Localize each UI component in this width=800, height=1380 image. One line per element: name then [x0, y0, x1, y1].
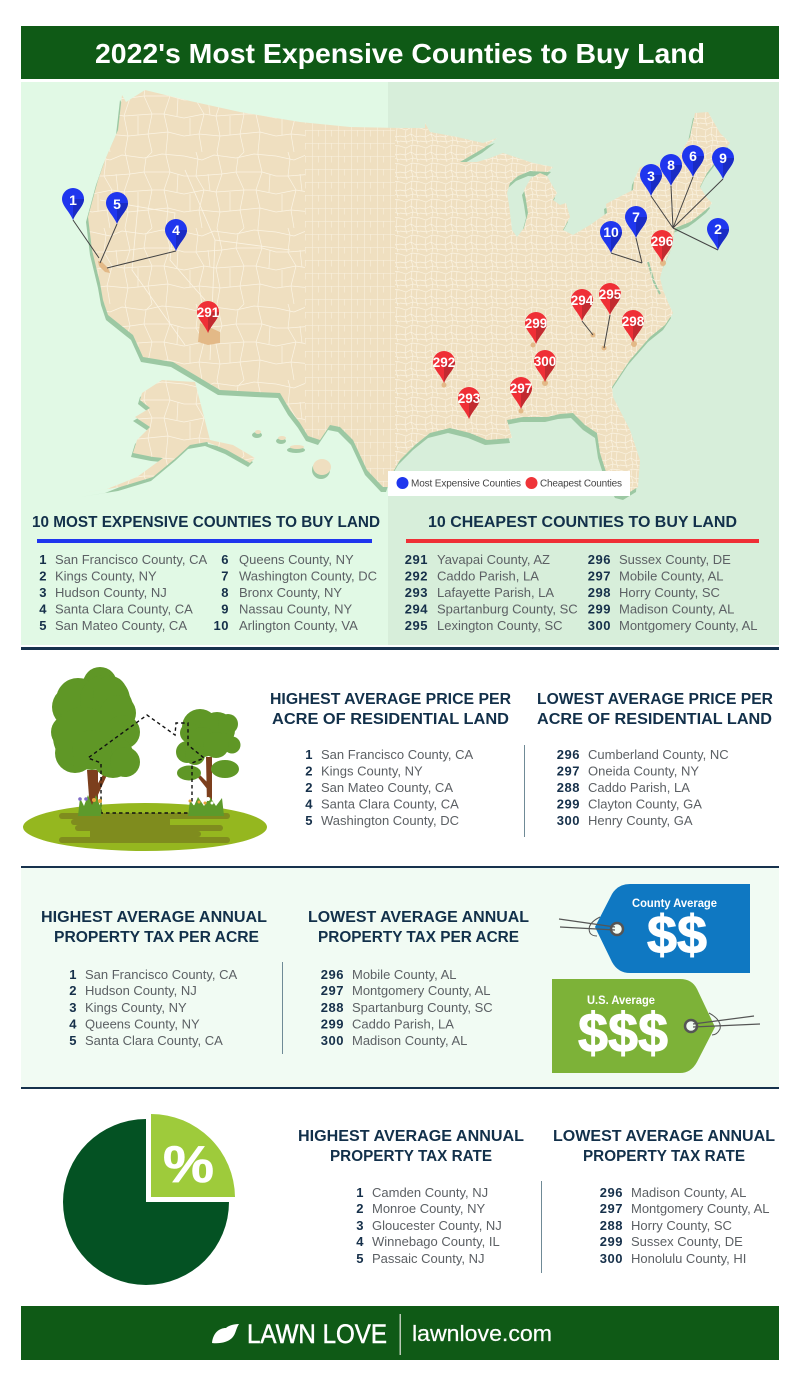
list: lowest annual tax per acre: 296 — [321, 967, 344, 982]
list: cheapest counties: Spartanburg County, SC — [437, 602, 578, 616]
list: lowest price per acre — [557, 747, 729, 828]
illustration: trees and dashed house on lawn — [23, 667, 267, 851]
icon: U.S. average price tag: U.S. Average — [587, 993, 655, 1007]
list: highest annual tax per acre: Santa Clara County, CA — [85, 1033, 223, 1048]
list: highest annual tax rate: 3 — [356, 1218, 364, 1233]
pin 10 — [600, 221, 622, 253]
list: most expensive counties: Arlington County, VA — [239, 618, 358, 633]
list: highest annual tax rate: 2 — [356, 1201, 364, 1216]
pin 297: 297 — [510, 381, 532, 396]
pin 5: 5 — [113, 196, 121, 212]
heading: 10 cheapest: 10 CHEAPEST COUNTIES TO BUY LAND — [428, 514, 737, 531]
list: highest annual tax per acre: Queens County, NY — [85, 1016, 200, 1032]
pin 298: 298 — [622, 314, 645, 329]
divider rule — [21, 866, 779, 868]
list: cheapest counties: Lexington County, SC — [437, 618, 562, 633]
list: cheapest counties: 296 — [588, 552, 611, 567]
list: lowest annual tax rate: 299 — [600, 1234, 623, 1249]
heading: lowest annual tax rate — [553, 1128, 775, 1165]
pin 296: 296 — [651, 234, 674, 249]
icon: U.S. average price tag — [552, 979, 760, 1073]
list: lowest annual tax per acre: 297 — [321, 983, 344, 998]
heading: highest price per acre: ACRE OF RESIDENTIAL LAND — [272, 711, 509, 728]
list: lowest annual tax rate: Sussex County, DE — [631, 1234, 743, 1249]
list: highest annual tax rate: Passaic County, NJ — [372, 1251, 484, 1266]
list: most expensive counties: Bronx County, NY — [239, 585, 342, 600]
list: highest annual tax per acre: Hudson County, NJ — [85, 983, 197, 998]
list: lowest annual tax rate: 296 — [600, 1185, 623, 1200]
list: highest price per acre: 5 — [305, 813, 313, 828]
map legend: Most Expensive Counties — [411, 478, 521, 490]
title banner — [21, 26, 779, 79]
list: lowest annual tax per acre: Spartanburg County, SC — [352, 1000, 493, 1015]
list: highest annual tax rate — [356, 1185, 502, 1266]
panel: property tax background — [21, 868, 779, 1087]
list: most expensive counties: 3 — [39, 585, 47, 600]
pin 2: 2 — [714, 221, 722, 237]
list: cheapest counties — [405, 552, 758, 633]
pin 7 — [625, 206, 647, 238]
pin 293: 293 — [458, 391, 481, 406]
list: highest price per acre: San Mateo County, CA — [321, 780, 453, 795]
list: most expensive counties: 4 — [39, 602, 47, 616]
list: highest price per acre: Santa Clara County, CA — [321, 796, 459, 812]
list: lowest annual tax per acre: Mobile County, AL — [352, 967, 457, 982]
list: cheapest counties: 291 — [405, 552, 428, 567]
map of US counties — [80, 85, 735, 500]
map: Hawaii land — [255, 430, 331, 475]
list: most expensive counties: Hudson County, NJ — [55, 585, 167, 600]
list: cheapest counties: Lafayette Parish, LA — [437, 585, 554, 600]
pin 292: 292 — [433, 355, 455, 370]
list: most expensive counties: 2 — [39, 568, 47, 584]
list: lowest annual tax per acre: Montgomery County, AL — [352, 983, 490, 998]
list: most expensive counties: 9 — [221, 602, 229, 616]
heading: highest annual tax rate — [298, 1128, 524, 1165]
heading: highest annual tax per acre — [41, 909, 267, 946]
list: cheapest counties: 299 — [588, 602, 611, 616]
heading: highest price per acre: HIGHEST AVERAGE PRICE PER — [270, 691, 511, 708]
pin 299 — [525, 312, 547, 344]
list: most expensive counties — [39, 552, 377, 633]
pin 2 — [707, 218, 729, 250]
bar: blue underline — [37, 539, 372, 543]
list: lowest annual tax rate: Honolulu County, HI — [631, 1251, 746, 1266]
list: lowest price per acre: 300 — [557, 813, 580, 828]
list: most expensive counties: 1 — [39, 552, 47, 567]
list: most expensive counties: 6 — [221, 552, 229, 567]
title banner: 2022's Most Expensive Counties to Buy Land — [95, 38, 705, 69]
pin 8 — [660, 154, 682, 186]
pin 295: 295 — [599, 287, 622, 302]
pin 10: 10 — [603, 224, 619, 240]
list: lowest price per acre: Clayton County, GA — [588, 796, 702, 812]
list: highest annual tax per acre: Kings County, NY — [85, 1000, 187, 1015]
pin 9: 9 — [719, 150, 727, 166]
list: highest annual tax rate: 5 — [356, 1251, 364, 1266]
heading: highest annual tax rate: PROPERTY TAX RATE — [330, 1148, 492, 1165]
divider rule — [21, 1087, 779, 1089]
list: cheapest counties: 292 — [405, 568, 428, 584]
list: most expensive counties: Washington County, DC — [239, 568, 377, 584]
list: lowest price per acre: Cumberland County, NC — [588, 747, 729, 762]
heading: lowest price per acre: ACRE OF RESIDENTIAL LAND — [537, 711, 772, 728]
list: lowest annual tax rate: 288 — [600, 1218, 623, 1233]
list: lowest price per acre: Henry County, GA — [588, 813, 693, 828]
list: most expensive counties: San Francisco County, CA — [55, 552, 208, 567]
vertical divider — [524, 745, 525, 837]
heading: highest annual tax per acre: PROPERTY TAX PER ACRE — [54, 929, 259, 946]
list: highest annual tax per acre: 5 — [69, 1033, 77, 1048]
list: highest annual tax rate: Monroe County, NY — [372, 1201, 486, 1216]
highlighted counties — [98, 260, 666, 414]
list: cheapest counties: 300 — [588, 618, 611, 633]
list: highest price per acre: 1 — [305, 747, 313, 762]
pin 6 — [682, 145, 704, 177]
list: cheapest counties: Montgomery County, AL — [619, 618, 758, 633]
list: highest annual tax per acre: San Francisco County, CA — [85, 967, 238, 982]
heading: 10 most expensive: 10 MOST EXPENSIVE COUNTIES TO BUY LAND — [32, 514, 380, 531]
bar: red underline — [406, 539, 759, 543]
list: lowest annual tax rate — [600, 1185, 770, 1266]
heading: highest annual tax per acre: HIGHEST AVERAGE ANNUAL — [41, 909, 267, 926]
icon: county average price tag: $$ — [647, 905, 707, 965]
list: most expensive counties: San Mateo County, CA — [55, 618, 187, 633]
list: lowest annual tax rate: Montgomery County, AL — [631, 1201, 770, 1216]
icon: Lawn Love leaf — [212, 1324, 239, 1343]
pin 291: 291 — [197, 305, 220, 320]
list: lowest annual tax rate: Madison County, AL — [631, 1185, 746, 1200]
list: highest annual tax per acre: 3 — [69, 1000, 77, 1015]
list: lowest annual tax per acre: Caddo Parish, LA — [352, 1016, 454, 1032]
heading: lowest annual tax per acre: PROPERTY TAX PER ACRE — [318, 929, 519, 946]
pin 297 — [510, 377, 532, 409]
list: lowest annual tax per acre: 288 — [321, 1000, 344, 1015]
pin 293 — [458, 387, 481, 419]
list: highest annual tax rate: Winnebago County, IL — [372, 1234, 500, 1249]
list: highest price per acre: 2 — [305, 780, 313, 795]
list: lowest annual tax per acre: 300 — [321, 1033, 344, 1048]
list: lowest price per acre: 288 — [557, 780, 580, 795]
list: lowest price per acre: 297 — [557, 764, 580, 778]
list: cheapest counties: Madison County, AL — [619, 602, 734, 616]
footer banner: LAWN LOVE — [247, 1319, 387, 1349]
pin 7: 7 — [632, 209, 640, 225]
list: lowest price per acre: 299 — [557, 796, 580, 812]
list: highest annual tax rate: Camden County, NJ — [372, 1185, 488, 1200]
list: highest annual tax per acre: 4 — [69, 1016, 77, 1032]
pie chart with percent slice — [63, 1114, 235, 1285]
pin 298 — [622, 310, 645, 342]
heading: lowest annual tax per acre: LOWEST AVERAGE ANNUAL — [308, 909, 529, 926]
pin 299: 299 — [525, 316, 547, 331]
heading: lowest annual tax per acre — [308, 909, 529, 946]
list: highest price per acre: San Francisco County, CA — [321, 747, 474, 762]
pin 3: 3 — [647, 168, 655, 184]
pin 300 — [534, 350, 556, 382]
list: highest annual tax per acre — [69, 967, 238, 1048]
heading: highest price per acre — [270, 691, 511, 728]
list: cheapest counties: 294 — [405, 602, 428, 616]
list: highest price per acre: Washington County, DC — [321, 813, 459, 828]
list: most expensive counties: Santa Clara County, CA — [55, 602, 193, 616]
footer banner — [21, 1306, 779, 1360]
vertical divider — [541, 1181, 542, 1273]
list: lowest annual tax per acre — [321, 967, 493, 1048]
footer banner: lawnlove.com — [412, 1321, 552, 1346]
list: highest annual tax rate: 4 — [356, 1234, 364, 1249]
panel: map and county rankings background — [21, 82, 779, 645]
list: lowest price per acre: Caddo Parish, LA — [588, 780, 690, 795]
map: Hawaii islands — [252, 432, 330, 479]
list: highest price per acre: 2 — [305, 764, 313, 778]
list: lowest annual tax rate: 297 — [600, 1201, 623, 1216]
list: cheapest counties: Mobile County, AL — [619, 568, 724, 584]
heading: lowest annual tax rate: PROPERTY TAX RATE — [583, 1148, 745, 1165]
list: cheapest counties: Sussex County, DE — [619, 552, 731, 567]
list: most expensive counties: 10 — [214, 618, 229, 633]
list: highest price per acre: 4 — [305, 796, 313, 812]
list: highest annual tax rate: Gloucester County, NJ — [372, 1218, 502, 1233]
list: lowest price per acre: Oneida County, NY — [588, 764, 699, 778]
list: highest annual tax per acre: 2 — [69, 983, 77, 998]
list: cheapest counties: Yavapai County, AZ — [437, 552, 550, 567]
list: highest price per acre — [305, 747, 474, 828]
pin 295 — [599, 283, 622, 315]
list: cheapest counties: 298 — [588, 585, 611, 600]
heading: lowest annual tax rate: LOWEST AVERAGE ANNUAL — [553, 1128, 775, 1145]
pie chart with percent slice: % — [163, 1136, 214, 1194]
pin 292 — [433, 351, 455, 383]
icon: U.S. average price tag: $$$ — [578, 1001, 668, 1064]
pin 4 — [165, 219, 187, 251]
heading: lowest price per acre — [537, 691, 773, 728]
pin 300: 300 — [534, 354, 556, 369]
list: lowest annual tax per acre: Madison County, AL — [352, 1033, 467, 1048]
pin 4: 4 — [172, 222, 180, 238]
pin 3 — [640, 164, 662, 196]
list: highest annual tax rate: 1 — [356, 1185, 364, 1200]
pin 296 — [651, 230, 674, 262]
pin 8: 8 — [667, 157, 675, 173]
icon: county average price tag: County Average — [632, 896, 717, 910]
list: lowest annual tax per acre: 299 — [321, 1016, 344, 1032]
list: most expensive counties: Kings County, NY — [55, 568, 157, 584]
pin 294: 294 — [571, 293, 594, 308]
list: lowest price per acre: 296 — [557, 747, 580, 762]
list: most expensive counties: 8 — [221, 585, 229, 600]
list: cheapest counties: 297 — [588, 568, 611, 584]
pin 1 — [62, 188, 84, 220]
list: lowest annual tax rate: Horry County, SC — [631, 1218, 732, 1233]
vertical divider — [282, 962, 283, 1054]
list: lowest annual tax rate: 300 — [600, 1251, 623, 1266]
list: most expensive counties: 5 — [39, 618, 47, 633]
list: highest price per acre: Kings County, NY — [321, 764, 423, 778]
leader lines — [73, 177, 723, 348]
list: cheapest counties: Caddo Parish, LA — [437, 568, 539, 584]
list: highest annual tax per acre: 1 — [69, 967, 77, 982]
list: most expensive counties: Queens County, NY — [239, 552, 354, 567]
heading: highest annual tax rate: HIGHEST AVERAGE ANNUAL — [298, 1128, 524, 1145]
list: cheapest counties: Horry County, SC — [619, 585, 720, 600]
map legend: Cheapest Counties — [540, 478, 622, 490]
list: cheapest counties: 293 — [405, 585, 428, 600]
divider rule — [21, 647, 779, 650]
map legend — [388, 471, 630, 496]
list: cheapest counties: 295 — [405, 618, 428, 633]
pin 9 — [712, 147, 734, 179]
list: most expensive counties: 7 — [221, 568, 229, 584]
pin 6: 6 — [689, 148, 697, 164]
pin 291 — [197, 301, 220, 333]
pin 1: 1 — [69, 192, 77, 208]
heading: lowest price per acre: LOWEST AVERAGE PRICE PER — [537, 691, 773, 708]
icon: county average price tag — [559, 884, 750, 973]
pin 294 — [571, 289, 594, 321]
list: most expensive counties: Nassau County, NY — [239, 602, 353, 616]
pin 5 — [106, 192, 128, 224]
